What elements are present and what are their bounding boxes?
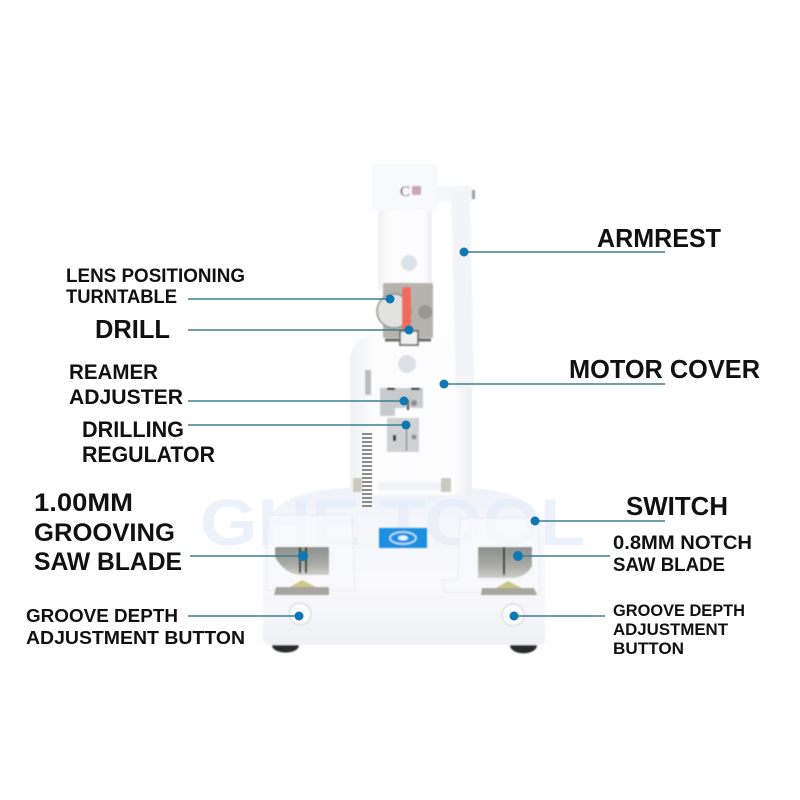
right notch saw blade [444, 518, 540, 595]
reamer adjuster panel [380, 388, 423, 416]
label: drilling regulator [82, 417, 410, 467]
spring coil [362, 434, 372, 506]
upper column and cap: C [400, 184, 410, 200]
adjustment knobs [289, 603, 524, 626]
label: switch [530, 491, 728, 526]
label: right groove depth adjustment button [510, 602, 745, 658]
label: 1.00mm grooving saw blade: 1.00MM [34, 489, 133, 517]
label: drilling regulator: DRILLING [82, 417, 184, 442]
label: lens positioning turntable: TURNTABLE [66, 287, 177, 308]
label: 1.00mm grooving saw blade [34, 489, 308, 576]
label: reamer adjuster: ADJUSTER [69, 386, 183, 409]
label: motor cover [440, 354, 760, 388]
lens positioning turntable and drill plate [377, 283, 433, 345]
watermark: GHE TOOL [200, 485, 585, 559]
label: reamer adjuster [69, 361, 408, 409]
label: lens positioning turntable: LENS POSITIONING [66, 266, 245, 287]
armrest handle [437, 186, 475, 388]
label: right groove depth adjustment button: ADJUSTMENT [613, 621, 728, 639]
label: 0.8mm notch saw blade [513, 533, 752, 576]
label: lens positioning turntable [66, 266, 394, 308]
label: left groove depth adjustment button [26, 606, 304, 648]
machine base [263, 488, 545, 653]
label: drill: DRILL [95, 314, 170, 344]
label: left groove depth adjustment button: GROOVE DEPTH [26, 606, 178, 626]
machine illustration [200, 164, 585, 653]
label: 0.8mm notch saw blade: 0.8MM NOTCH [613, 533, 752, 554]
label: 1.00mm grooving saw blade: SAW BLADE [34, 548, 182, 576]
centre badge [379, 528, 427, 548]
label: motor cover: MOTOR COVER [569, 354, 760, 384]
label: drilling regulator: REGULATOR [82, 442, 215, 467]
label: armrest [460, 223, 721, 256]
label: right groove depth adjustment button: GROOVE DEPTH [613, 602, 745, 620]
label: switch: SWITCH [626, 491, 728, 521]
label: 1.00mm grooving saw blade: GROOVING [34, 519, 175, 547]
label: drill [95, 314, 414, 344]
motor cover [350, 335, 472, 495]
drilling regulator scale [387, 418, 419, 452]
upper column and cap [372, 164, 438, 290]
label: armrest: ARMREST [597, 223, 721, 253]
label: left groove depth adjustment button: ADJUSTMENT BUTTON [26, 628, 245, 648]
label: right groove depth adjustment button: BUTTON [613, 640, 684, 658]
left grooving saw blade [266, 515, 355, 595]
label: 0.8mm notch saw blade: SAW BLADE [613, 555, 725, 576]
label: reamer adjuster: REAMER [69, 361, 158, 384]
